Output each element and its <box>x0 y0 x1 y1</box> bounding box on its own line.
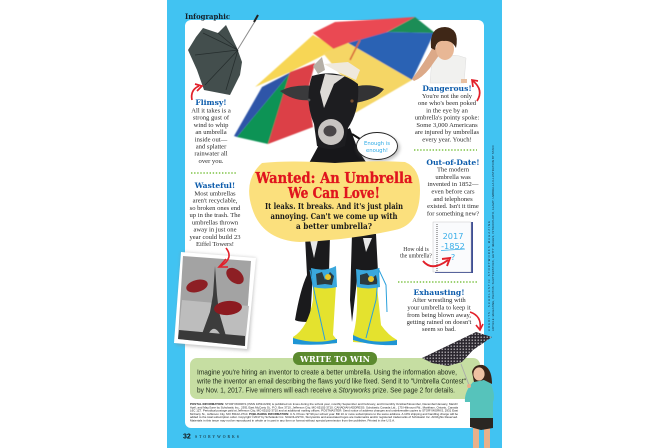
goat body <box>308 128 368 165</box>
goat head <box>308 73 358 149</box>
text: Exhausting: getting rained on doesn't <box>407 319 472 326</box>
goat horn and cap <box>313 57 325 74</box>
arrow: Wasteful to photo <box>219 248 229 267</box>
text: Exhausting: your umbrella to keep it <box>407 304 471 312</box>
main title <box>255 170 413 202</box>
text: Exhausting: from being blown away, <box>407 312 471 319</box>
text: Out-of-Date: and telephones <box>433 196 473 203</box>
text: Out-of-Date: existed. Isn't it time <box>427 203 479 210</box>
text: Out-of-Date <box>426 158 480 217</box>
text: Out-of-Date: umbrella was <box>435 174 471 181</box>
arrow: notebook <box>423 258 450 266</box>
text: Flimsy: inside out— <box>195 136 228 143</box>
text: Wasteful: umbrellas thrown <box>192 219 239 226</box>
text: Out-of-Date: invented in 1852— <box>428 181 479 188</box>
write to win panel <box>190 352 480 399</box>
text: Dangerous: in the eye by an <box>426 108 469 114</box>
fine print <box>190 402 459 422</box>
text: Dangerous: every year. Youch! <box>422 137 472 144</box>
write to win badge <box>293 352 377 365</box>
icon: big rainbow umbrella <box>234 17 435 144</box>
jacket <box>465 380 494 418</box>
white content panel <box>185 20 484 428</box>
arrow: Exhausting <box>470 312 483 330</box>
folio: page number and magazine name: STORYWORKS <box>195 435 241 439</box>
text: Exhausting: After wrestling with <box>412 297 466 304</box>
icon: notebook: 2017 <box>443 231 463 241</box>
text: Wasteful: so broken ones end <box>190 205 241 212</box>
subtitle: a better umbrella? <box>296 221 372 231</box>
icon: goat <box>280 57 384 165</box>
text: Flimsy: strong gust of <box>193 115 230 122</box>
text: Out-of-Date: Out-of-Date! <box>426 158 480 167</box>
text: Wasteful: year could build 23 <box>189 234 241 241</box>
text: Dangerous <box>415 84 480 144</box>
text: Flimsy: and splatter <box>196 144 227 150</box>
hair and face <box>472 365 492 384</box>
text: Flimsy: All it takes is a <box>191 108 231 114</box>
caption: how old: the umbrella? <box>400 254 432 260</box>
tower <box>202 266 226 336</box>
text: Wasteful: away in just one <box>193 226 237 234</box>
legs <box>473 425 479 448</box>
right rain boot <box>353 268 397 345</box>
icon: polka dot umbrella <box>422 332 492 385</box>
goat legs <box>295 234 378 322</box>
text: Wasteful <box>189 181 241 248</box>
caption: how old: How old is <box>403 247 429 253</box>
left rain boot <box>293 266 337 345</box>
fine print: Materials in this issue may not be reproduced in whole or in part in any form or format without special permission from the publisher. Printed in the U.S.A. <box>190 418 395 422</box>
photo: girl holding umbrella <box>465 365 494 448</box>
photo: Eiffel Tower with red umbrellas <box>174 252 256 351</box>
folio: page number and magazine name <box>183 434 241 440</box>
shorts <box>470 416 493 430</box>
write to win panel: write the inventor an email describing the flaws you'd like fixed. Send it to "Umbrella Contest" <box>196 378 466 386</box>
text: Flimsy: rainwater all <box>194 151 228 158</box>
text: Flimsy <box>191 98 231 165</box>
page background <box>167 0 502 448</box>
icon: notebook <box>433 222 473 273</box>
central yellow title blob <box>249 161 420 242</box>
main title: Wanted: An Umbrella <box>255 170 413 187</box>
text: Dangerous: You're not the only <box>422 93 473 100</box>
text: Flimsy: over you. <box>199 158 224 165</box>
text: Out-of-Date: for something new? <box>427 210 479 217</box>
text: Flimsy: Flimsy! <box>195 98 227 107</box>
text: Flimsy: wind to whip <box>194 122 229 129</box>
fine print: McCarty St., Jefferson City, MO 65102-3710. PUBLISHING INFORMATION: U.S. Prices: $7.99 per school year. Bill 10 or more subscriptions to the same address. A 10% shipping and handling charge will be <box>190 412 459 416</box>
main title: We Can Love! <box>287 185 380 202</box>
text: Dangerous: Some 3,000 Americans <box>416 122 478 129</box>
subtitle: annoying. Can't we come up with <box>270 211 398 221</box>
fine print: POSTAL INFORMATION: STORYWORKS (ISSN 1059-0293) is published six times during the school year, monthly September and February, and bimonthly October/November, December/January, March/ <box>190 402 458 406</box>
write to win badge: WRITE TO WIN <box>299 354 370 364</box>
fine print: L6C 1Z7. Periodical postage paid at Jefferson City, MO 65102-3710 and at additional mailing offices. POSTMASTER: Send notice of address changes and undeliverable copies to STORYWORKS, 2931 East <box>190 409 458 413</box>
text: Out-of-Date: The modern <box>437 166 470 174</box>
speech bubble: enough! <box>366 148 388 154</box>
text: Dangerous: umbrella's pointy spoke: <box>415 115 479 122</box>
subtitle: It leaks. It breaks. And it's just plain <box>265 201 403 211</box>
red umbrellas <box>185 277 209 295</box>
text: Exhausting <box>407 288 472 333</box>
folio: page number and magazine name: 32 <box>183 434 191 440</box>
text: Wasteful: Eiffel Towers! <box>196 241 234 248</box>
goat white blaze <box>320 74 345 108</box>
fine print: added to the total subscription order. Copyright ©2017 by Scholastic Inc. SCHOLASTIC, Storyworks and associated logos are trademarks and/or registered trademarks of Scholastic Inc. All Rights Reserved. <box>190 415 458 419</box>
text: Wasteful: Most umbrellas <box>194 190 236 198</box>
photo: boy rubbing eye <box>412 27 467 83</box>
goat muzzle <box>318 119 344 145</box>
write to win panel: Imagine you're hiring an inventor to create a better umbrella. Using the information above, <box>197 368 457 376</box>
text: Flimsy: an umbrella <box>195 129 227 136</box>
text: CREDITS: SCHOLASTIC STORYWORKS MAGAZINE <box>487 221 491 331</box>
arrow: flimsy <box>192 84 202 100</box>
text: Exhausting: seem so bad. <box>422 326 456 333</box>
fine print: April, and May/June by Scholastic Inc., 2931 East McCarty St., P.O. Box 3710, Jefferson City, MO 65102-3710. CANADIAN ADDRESS: Scholastic Canada Ltd., 175 Hillmount Rd., Markham, Ontario, Canada <box>190 405 459 409</box>
icon: notebook: -1852 <box>441 241 465 251</box>
subtitle <box>265 201 403 231</box>
goat ears <box>280 86 314 100</box>
text: Wasteful: Wasteful! <box>194 181 235 190</box>
text: Wasteful: aren't recyclable, <box>193 198 238 205</box>
text: Wasteful: up in the trash. The <box>190 212 241 219</box>
vertical credits: ARTICLE: MAGAZINE, PHOTOS: SHUTTERSTOCK, GETTY IMAGES, ISTOCKPHOTO, ALAMY, UMBRELLA ILLUSTRATION BY STAFF <box>491 145 495 331</box>
write to win panel: by Nov. 1, 2017. Five winners will each receive a Storyworks prize. See page 2 for details. <box>197 386 455 394</box>
caption: how old <box>400 247 432 260</box>
text: Dangerous: Dangerous! <box>422 84 472 93</box>
text: Dangerous: are injured by umbrellas <box>415 129 480 136</box>
text: Out-of-Date: even before cars <box>431 189 475 196</box>
speech bubble: Enough is <box>364 141 390 147</box>
arrow: Dangerous <box>472 80 480 101</box>
section label: Infographic: Infographic <box>185 12 230 21</box>
text: Dangerous: one who's been poked <box>418 100 477 107</box>
text: Exhausting: Exhausting! <box>413 288 465 297</box>
icon: broken inside-out umbrella <box>188 15 258 95</box>
speech bubble <box>352 132 400 162</box>
icon: notebook: ? <box>451 252 455 262</box>
